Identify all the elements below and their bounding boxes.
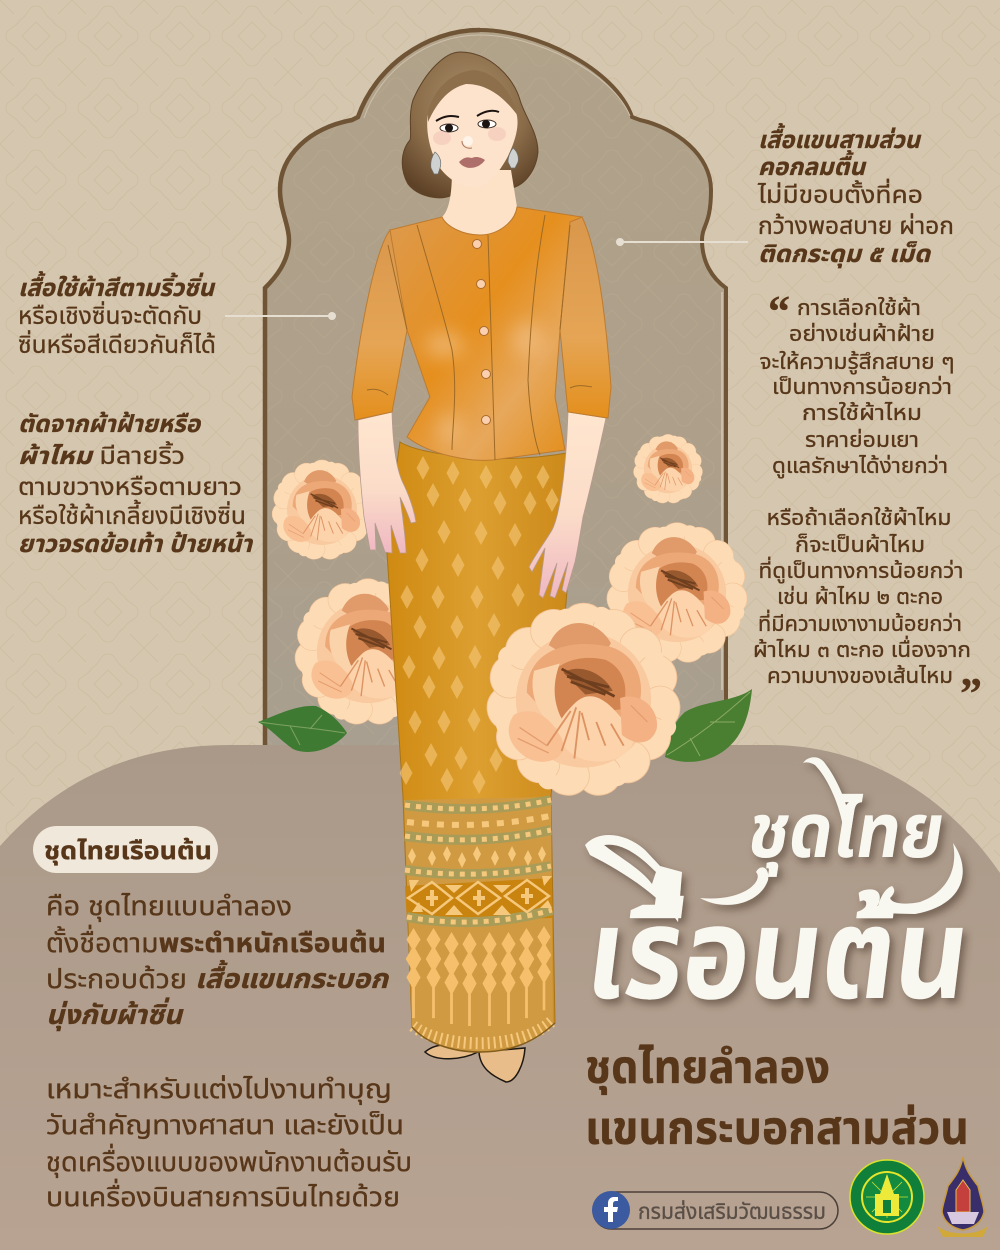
heading pill [33, 826, 218, 873]
forelock [428, 70, 518, 122]
skirt hem pattern [404, 797, 555, 1052]
text block: collar description: ไม่มีขอบตั้งที่คอ [757, 178, 923, 209]
callout connector: left [225, 312, 336, 320]
title line one: ชุดไทย [742, 789, 951, 877]
blouse highlights [425, 322, 544, 446]
arch niche [265, 30, 726, 746]
eyebrows, eyes, nose, lips [433, 111, 506, 168]
quote block: ที่มีความเงางามน้อยกว่า [758, 609, 962, 636]
callout connector: right [616, 238, 748, 246]
quote block: ก็จะเป็นผ้าไหม [795, 532, 925, 557]
shoes [425, 1045, 525, 1082]
text block: collar description: กว้างพอสบาย ผ่าอก [758, 212, 954, 240]
text block: definition: ประกอบด้วย เสื้อแขนกระบอก [46, 960, 389, 994]
text block: occasions: ชุดเครื่องแบบของพนักงานต้อนรับ [46, 1143, 412, 1178]
lower panel [0, 745, 1000, 1250]
text block: skirt fabric: ตามขวางหรือตามยาว [18, 474, 242, 501]
text block: skirt fabric [18, 411, 254, 558]
leaf: right [665, 689, 752, 762]
blouse body [388, 207, 582, 460]
text block: fabric colour [18, 271, 216, 359]
quote block: เช่น ผ้าไหม ๒ ตะกอ [777, 585, 943, 609]
text block: occasions [46, 1074, 412, 1212]
closing quote mark: ” [960, 669, 982, 718]
left arm and hand [358, 412, 416, 553]
figure in Thai dress [352, 52, 611, 1082]
quote block: อย่างเช่นผ้าฝ้าย [789, 322, 935, 346]
quote block: ดูแลรักษาได้ง่ายกว่า [772, 454, 948, 479]
text block: collar description: คอกลมตื้น [758, 150, 867, 181]
text block: occasions: วันสำคัญทางศาสนา และยังเป็น [46, 1110, 404, 1140]
quote block: ผ้าไหม ๓ ตะกอ เนื่องจาก [753, 635, 971, 662]
earrings [431, 148, 518, 174]
flower: large front [485, 603, 682, 799]
icon: facebook [592, 1191, 630, 1229]
quote block: เป็นทางการน้อยกว่า [772, 375, 952, 399]
heading pill: ชุดไทยเรือนต้น [44, 837, 212, 866]
text block: collar description: เสื้อแขนสามส่วน [758, 123, 921, 154]
blouse seams and buttons [367, 215, 592, 460]
text block: definition [46, 891, 389, 1032]
leaf: left [258, 706, 347, 752]
blouse sleeves [352, 217, 611, 420]
subtitle: แขนกระบอกสามส่วน [585, 1102, 969, 1154]
skirt [387, 442, 567, 1052]
quote block: ราคาย่อมเยา [805, 428, 919, 452]
subtitle [585, 1041, 969, 1154]
subtitle: ชุดไทยลำลอง [585, 1041, 830, 1095]
hair [402, 52, 538, 198]
text block: definition: คือ ชุดไทยแบบลำลอง [46, 891, 292, 922]
facebook pill: กรมส่งเสริมวัฒนธรรม [638, 1199, 826, 1224]
text block: fabric colour: หรือเชิงซิ่นจะตัดกับ [18, 300, 202, 330]
decorative title flourishes [585, 757, 963, 922]
flower: behind skirt left [293, 578, 443, 727]
opening quote mark: “ [768, 287, 790, 336]
logo: department of cultural promotion [850, 1160, 924, 1234]
text block: occasions: เหมาะสำหรับแต่งไปงานทำบุญ [46, 1074, 392, 1105]
quote block: การใช้ผ้าไหม [802, 401, 922, 425]
text block: skirt fabric: ผ้าไหม มีลายริ้ว [18, 440, 185, 470]
text block: skirt fabric: ยาวจรดข้อเท้า ป้ายหน้า [18, 531, 254, 558]
text block: fabric colour: เสื้อใช้ผ้าสีตามริ้วซิ่น [18, 271, 215, 302]
face [427, 84, 518, 188]
facebook pill [592, 1191, 838, 1229]
main title [580, 757, 977, 1026]
text block: skirt fabric: หรือใช้ผ้าเกลี้ยงมีเชิงซิ่น [18, 499, 246, 530]
logo: ministry emblem [937, 1157, 988, 1237]
text block: occasions: บนเครื่องบินสายการบินไทยด้วย [46, 1178, 400, 1212]
text block: fabric colour: ซิ่นหรือสีเดียวกันก็ได้ [18, 329, 216, 359]
flower: small upper right [633, 434, 703, 505]
quote block: การเลือกใช้ผ้า [797, 296, 921, 320]
quote block: หรือถ้าเลือกใช้ผ้าไหม [766, 506, 952, 530]
flower: right [605, 522, 749, 665]
text block: definition: นุ่งกับผ้าซิ่น [46, 998, 185, 1032]
text block: definition: ตั้งชื่อตามพระตำหนักเรือนต้น [46, 924, 386, 958]
quote block: ที่ดูเป็นทางการน้อยกว่า [758, 556, 964, 584]
flower: upper left [271, 460, 373, 561]
quote block: ความบางของเส้นไหม [767, 664, 953, 688]
neck [442, 170, 517, 235]
right arm and hand [529, 412, 606, 598]
quote block [753, 287, 982, 718]
quote block: จะให้ความรู้สึกสบาย ๆ [760, 350, 954, 375]
text block: skirt fabric: ตัดจากผ้าฝ้ายหรือ [18, 411, 202, 438]
text block: collar description [757, 123, 954, 269]
text block: collar description: ติดกระดุม ๕ เม็ด [758, 241, 932, 269]
skirt diamonds [400, 456, 558, 794]
